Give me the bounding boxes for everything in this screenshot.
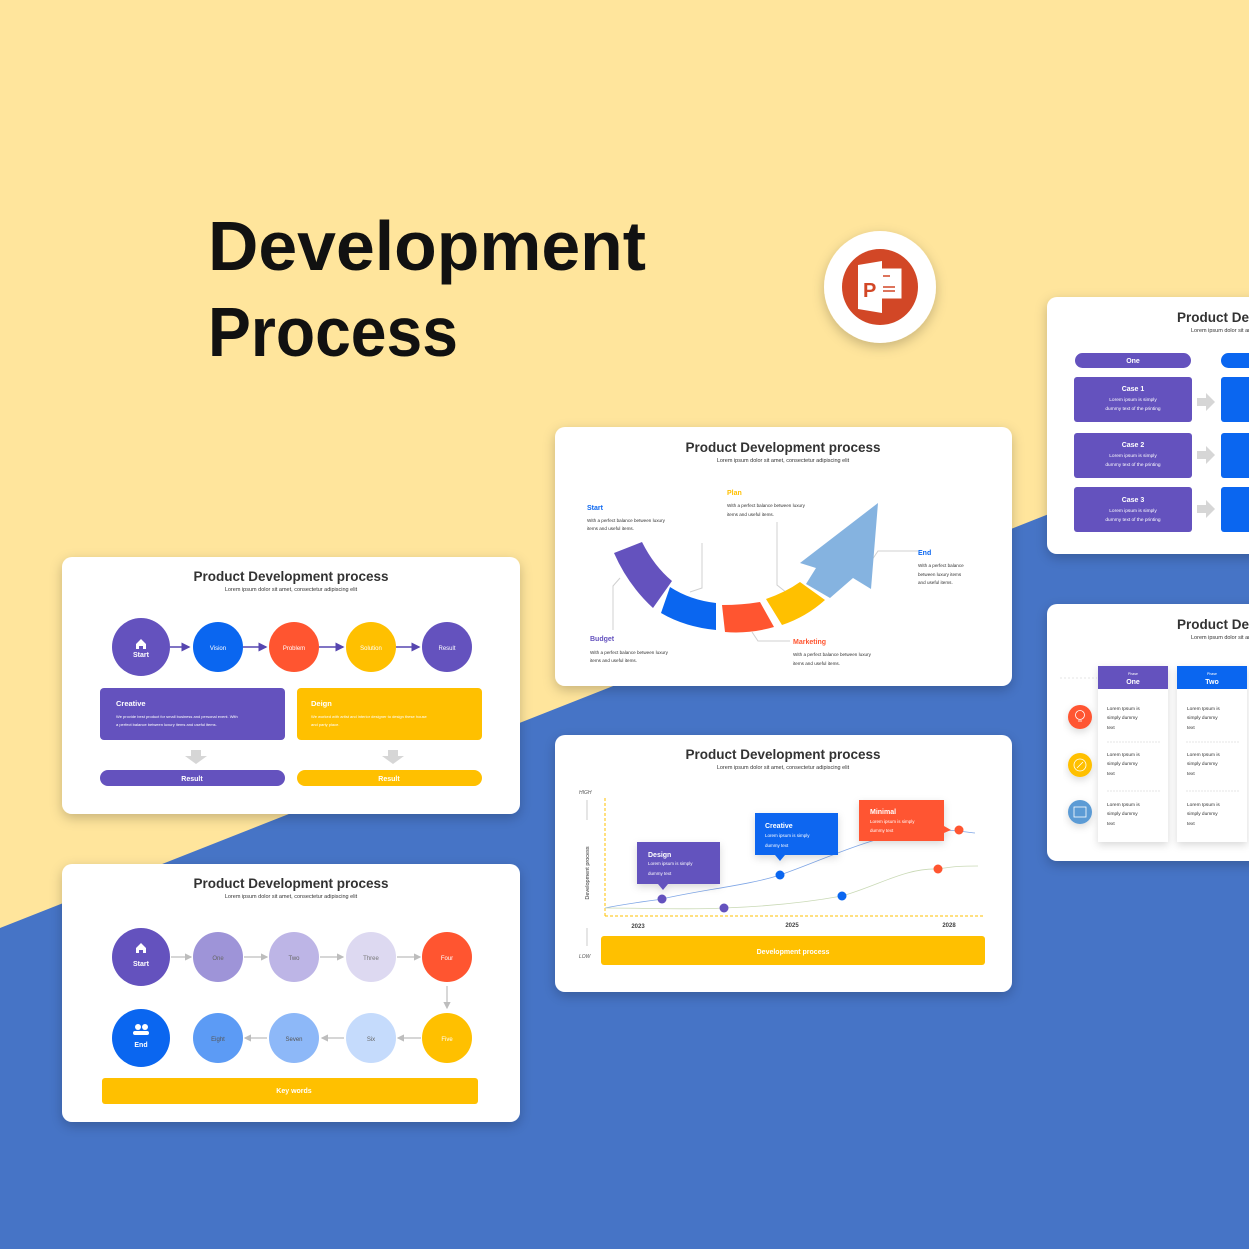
callout: Minimal: Lorem ipsum is simply [870, 819, 915, 824]
heading: Product Development process [685, 440, 881, 455]
result pills [100, 770, 482, 786]
panel: phases (right, cropped) [1047, 604, 1249, 861]
heading: Product Development process [193, 569, 389, 584]
labels: items and useful items. [727, 512, 774, 517]
labels: End [918, 550, 931, 557]
flow circles: Problem [283, 646, 305, 652]
callout: Minimal [859, 800, 951, 841]
circles row 2: Eight [211, 1037, 225, 1043]
labels: Marketing [793, 639, 826, 646]
title: Development [208, 207, 646, 285]
heading [1177, 617, 1249, 641]
title [208, 207, 646, 371]
phase columns: Lorem Ipsum is [1107, 706, 1140, 712]
labels [587, 490, 964, 666]
column headers [1075, 353, 1249, 368]
case boxes: Lorem ipsum is simply [1109, 453, 1157, 459]
case boxes: Case 2 [1122, 442, 1144, 449]
year labels: 2023 [631, 924, 645, 930]
box: Deign [297, 688, 482, 740]
callout: Creative: dummy text [765, 843, 789, 848]
flow circles: Vision [210, 646, 226, 652]
y axis label: HIGH [579, 790, 592, 796]
phase columns: simply dummy [1187, 715, 1218, 721]
heading: Product Development process [685, 747, 881, 762]
flow circles: Result [438, 646, 456, 652]
circles row 2: Five [441, 1037, 453, 1043]
arc segments [614, 503, 878, 632]
circles row 1: Two [288, 956, 300, 962]
case boxes: Lorem ipsum is simply [1109, 508, 1157, 514]
labels: and useful items. [918, 580, 953, 585]
box: Creative: Creative [116, 699, 146, 708]
heading: Lorem ipsum dolor sit amet, consectetur adipiscing elit [717, 458, 850, 464]
y axis label: Development process [585, 846, 591, 900]
title: Process [208, 293, 458, 371]
case boxes: Case 1 [1122, 386, 1144, 393]
panel: line chart [555, 735, 1012, 992]
case boxes: Lorem ipsum is simply [1109, 397, 1157, 403]
case boxes [1074, 377, 1249, 532]
phase columns: Lorem Ipsum is [1107, 752, 1140, 758]
circles row 2 [112, 1009, 472, 1067]
year labels: 2025 [785, 923, 799, 929]
labels: items and useful items. [587, 526, 634, 531]
year labels [631, 923, 956, 930]
callout: Design [637, 842, 720, 890]
heading: Lorem ipsum dolor sit amet, consectetur adipiscing elit [717, 765, 850, 771]
axes [605, 798, 985, 916]
phase columns: text [1107, 725, 1115, 731]
panel: flow with Creative/Design [62, 557, 520, 814]
case boxes: Case 3 [1122, 497, 1144, 504]
callout: Design: dummy text [648, 871, 672, 876]
phase columns: text [1107, 771, 1115, 777]
phase columns: text [1187, 725, 1195, 731]
arrows down [185, 750, 404, 764]
phase columns: Lorem Ipsum is [1187, 802, 1220, 808]
labels: Start [587, 505, 604, 512]
box: Creative: a perfect balance between luxury items and useful items. [116, 722, 217, 727]
phase columns [1098, 666, 1247, 842]
labels: Plan [727, 490, 742, 497]
phase columns: simply dummy [1107, 715, 1138, 721]
result pills: Result [378, 776, 400, 783]
heading [685, 747, 881, 771]
circles row 1: Start [133, 961, 150, 968]
phase columns: simply dummy [1107, 811, 1138, 817]
panel: arc arrow [555, 427, 1012, 686]
phase columns: text [1187, 771, 1195, 777]
labels: With a perfect balance between luxury [793, 652, 872, 657]
y axis label: LOW [579, 954, 592, 960]
circles row 1: One [212, 956, 224, 962]
labels: With a perfect balance between luxury [727, 503, 806, 508]
heading [1177, 310, 1249, 334]
bar: development process [601, 936, 985, 965]
phase columns: simply dummy [1187, 811, 1218, 817]
y axis label [579, 790, 592, 960]
circles row 2: End [134, 1042, 148, 1049]
box: Deign: and party place. [311, 722, 339, 727]
box: Creative [100, 688, 285, 740]
phase columns: Phase [1128, 672, 1138, 676]
icon: powerpoint logo: P [863, 280, 876, 302]
circles row 1: Three [363, 956, 379, 962]
lines [605, 830, 978, 909]
dots [658, 826, 964, 912]
icons [1068, 705, 1092, 824]
icon: powerpoint logo [824, 231, 936, 343]
circles row 2: Seven [285, 1037, 303, 1043]
connector lines [613, 522, 918, 641]
callout: Minimal: Minimal [870, 809, 896, 816]
labels: Budget [590, 636, 615, 643]
callout: Design: Design [648, 852, 671, 859]
circles row 2: Six [367, 1037, 375, 1043]
case boxes: dummy text of the printing [1105, 406, 1161, 412]
phase columns: Lorem Ipsum is [1107, 802, 1140, 808]
flow circles: Start [133, 652, 150, 659]
heading: Lorem ipsum dolor sit amet, consectetur adipiscing elit [225, 894, 358, 900]
heading: Lorem ipsum dolor sit amet, consectetur adipiscing elit [225, 587, 358, 593]
bar: development process: Development process [757, 949, 829, 956]
callout: Creative: Creative [765, 823, 793, 830]
labels: items and useful items. [793, 661, 840, 666]
column headers: One [1126, 358, 1140, 365]
heading: Product Development process [193, 876, 389, 891]
case boxes: dummy text of the printing [1105, 462, 1161, 468]
labels: items and useful items. [590, 658, 637, 663]
case boxes: dummy text of the printing [1105, 517, 1161, 523]
callout: Creative [755, 813, 838, 861]
circles row 1: Four [441, 956, 453, 962]
phase columns: Two [1205, 679, 1219, 686]
phase columns: simply dummy [1107, 761, 1138, 767]
panel: cases (right, cropped) [1047, 297, 1249, 554]
bar: key words: Key words [276, 1088, 312, 1095]
arrows [1197, 393, 1215, 518]
flow circles [112, 618, 472, 676]
callout: Creative: Lorem ipsum is simply [765, 833, 810, 838]
labels: With a perfect balance between luxury [590, 650, 669, 655]
phase columns: Lorem Ipsum is [1187, 706, 1220, 712]
phase columns: Phase [1207, 672, 1217, 676]
result pills: Result [181, 776, 203, 783]
phase columns: simply dummy [1187, 761, 1218, 767]
phase columns: text [1187, 821, 1195, 827]
callout: Design: Lorem ipsum is simply [648, 861, 693, 866]
phase columns: One [1126, 679, 1140, 686]
heading [193, 569, 389, 593]
arrows [171, 957, 447, 1038]
heading [685, 440, 881, 464]
year labels: 2028 [942, 923, 956, 929]
panel: ten step flow [62, 864, 520, 1122]
box: Deign: We worked with artist and interior designer to design these house [311, 714, 428, 719]
box: Creative: We provide best product for small business and personal event. With [116, 714, 238, 719]
phase columns: Lorem Ipsum is [1187, 752, 1220, 758]
bar: key words [102, 1078, 478, 1104]
box: Deign: Deign [311, 699, 332, 708]
heading [193, 876, 389, 900]
phase columns: text [1107, 821, 1115, 827]
labels: With a perfect balance [918, 563, 964, 568]
labels: With a perfect balance between luxury [587, 518, 666, 523]
circles row 1 [112, 928, 472, 986]
flow circles: Solution [360, 646, 382, 652]
labels: between luxury items [918, 572, 962, 577]
callout: Minimal: dummy text [870, 828, 894, 833]
